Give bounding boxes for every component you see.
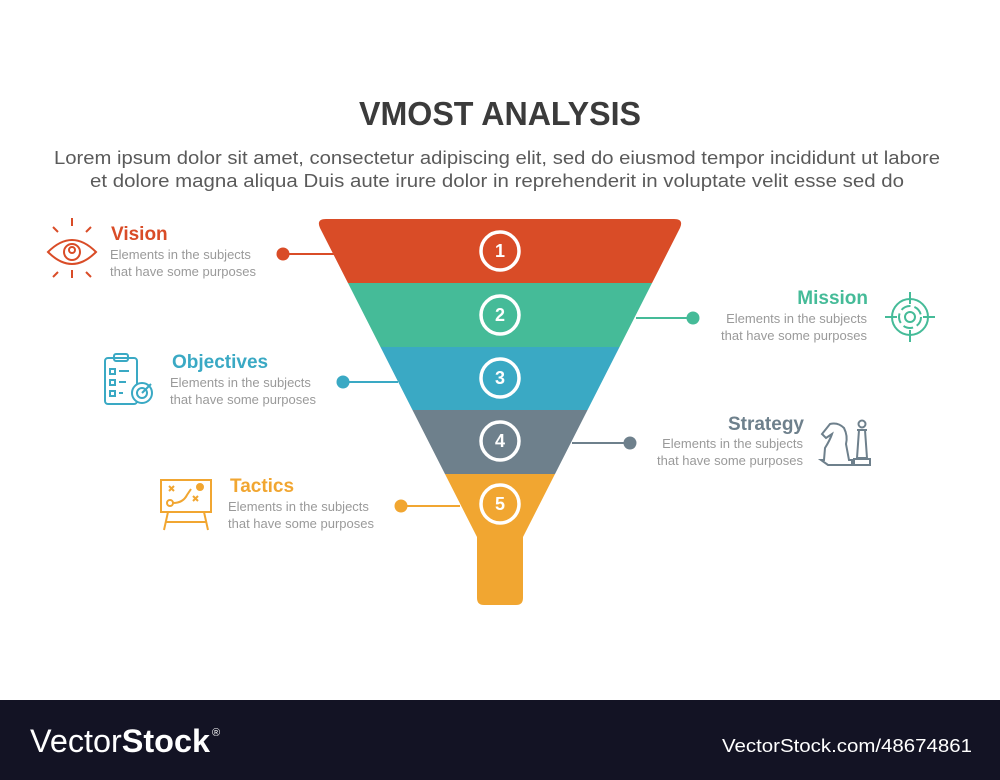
text: mission: Elements in the subjects bbox=[726, 311, 867, 326]
icon: clipboard bbox=[105, 354, 152, 404]
icon: eye bbox=[48, 218, 96, 278]
text: mission: that have some purposes bbox=[721, 328, 867, 343]
text: tactics: Elements in the subjects bbox=[228, 499, 369, 514]
subtitle: Lorem ipsum dolor sit amet, consectetur adipiscing elit, sed do eiusmod tempor incididunt ut labore bbox=[54, 148, 940, 168]
text: mission: Mission bbox=[797, 288, 868, 309]
subtitle bbox=[54, 148, 940, 191]
text: strategy: Strategy bbox=[728, 414, 804, 435]
text: tactics: Tactics bbox=[230, 476, 294, 497]
title: VMOST ANALYSIS bbox=[359, 95, 641, 132]
footer: ® bbox=[212, 727, 220, 739]
text: tactics: that have some purposes bbox=[228, 516, 374, 531]
text: strategy: that have some purposes bbox=[657, 453, 803, 468]
footer: VectorStock.com/48674861 bbox=[722, 736, 972, 756]
footer: VectorStock bbox=[30, 723, 210, 759]
text: objectives: that have some purposes bbox=[170, 392, 316, 407]
footer bbox=[0, 700, 1000, 780]
icon: chess bbox=[821, 420, 870, 465]
text: strategy: Elements in the subjects bbox=[662, 436, 803, 451]
icon: tactics board bbox=[161, 480, 211, 530]
text: objectives: Elements in the subjects bbox=[170, 375, 311, 390]
number circles bbox=[481, 232, 519, 523]
funnel bbox=[318, 219, 682, 605]
text: 2 bbox=[495, 305, 505, 325]
text: objectives: Objectives bbox=[172, 352, 268, 373]
text: vision: that have some purposes bbox=[110, 264, 256, 279]
text: strategy bbox=[657, 414, 804, 468]
text: vision bbox=[110, 224, 256, 279]
text: mission bbox=[721, 288, 868, 343]
text: 5 bbox=[495, 494, 505, 514]
text: 3 bbox=[495, 368, 505, 388]
text: tactics bbox=[228, 476, 374, 531]
text: vision: Elements in the subjects bbox=[110, 247, 251, 262]
text: vision: Vision bbox=[111, 224, 168, 245]
text: 1 bbox=[495, 241, 505, 261]
subtitle: et dolore magna aliqua Duis aute irure dolor in reprehenderit in voluptate velit esse sed do bbox=[90, 171, 904, 191]
text: 4 bbox=[495, 431, 505, 451]
connectors bbox=[276, 248, 700, 512]
text: objectives bbox=[170, 352, 316, 407]
icon: target bbox=[885, 292, 935, 342]
